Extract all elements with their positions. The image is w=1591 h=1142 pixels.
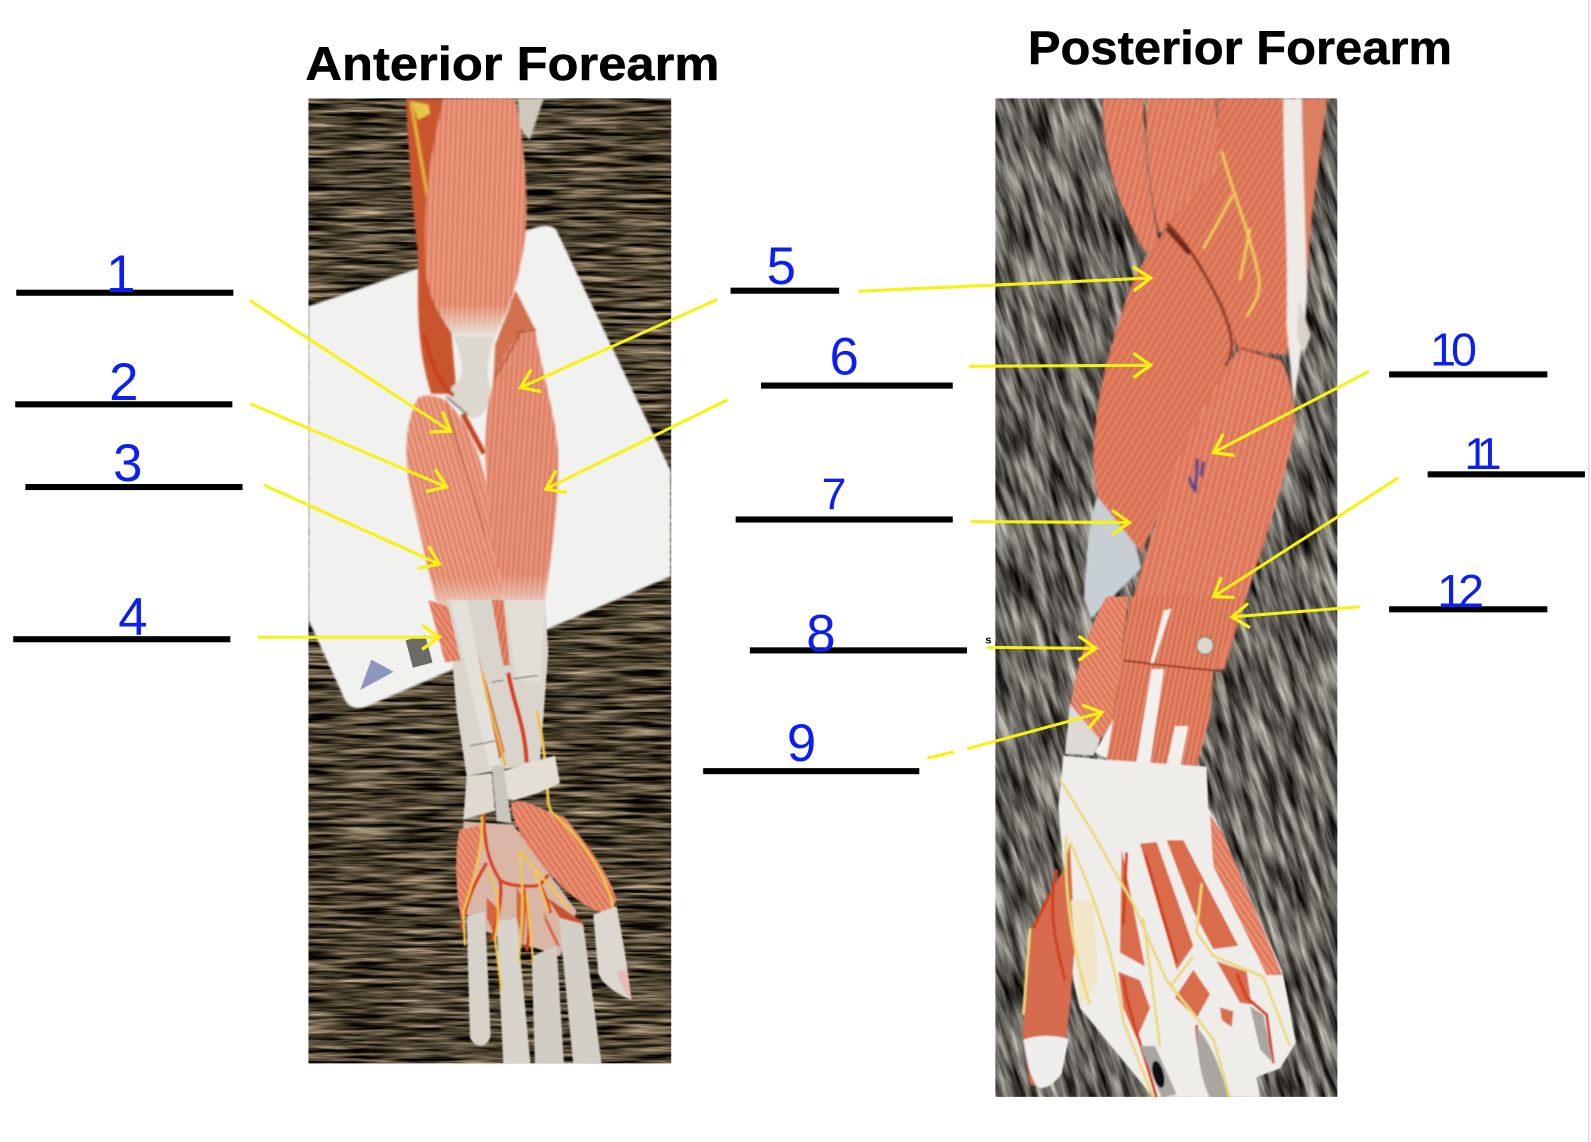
arrow 8 — [987, 647, 1096, 648]
upper arm muscles — [1103, 98, 1327, 406]
palm — [463, 821, 577, 956]
upper arm muscles — [406, 98, 544, 418]
arrow 4 — [258, 636, 439, 639]
panel: posterior wrist and hand — [1023, 597, 1296, 1100]
number 10: 10 — [1430, 323, 1476, 375]
number 3: 3 — [113, 434, 143, 493]
outer muscle — [1210, 814, 1283, 975]
pin — [1197, 637, 1213, 654]
number 6: 6 — [830, 327, 859, 386]
number 11: 11 — [1464, 430, 1500, 479]
forearm tendons — [447, 600, 548, 776]
interosseous muscles — [1118, 840, 1252, 1039]
wrist band — [463, 773, 495, 820]
tendon strips — [1095, 609, 1188, 768]
arrow 11 — [1214, 478, 1398, 597]
arrow 10 — [1214, 371, 1369, 453]
finger gaps — [1140, 1006, 1273, 1098]
carpet background — [995, 98, 1338, 1097]
arrow 9 stub — [927, 752, 954, 758]
nerves — [463, 811, 613, 991]
arrow 2 — [251, 404, 446, 487]
page edge — [1588, 0, 1590, 1142]
cream panel — [1071, 900, 1098, 1008]
panel: anterior forearm photo — [308, 98, 672, 1063]
arrow 3 — [264, 485, 439, 564]
arrow 12 — [1232, 607, 1360, 617]
board logo — [360, 660, 394, 690]
stray mark: s — [985, 634, 991, 646]
lower extensor muscles — [1070, 597, 1128, 740]
forearm flexor muscles — [406, 396, 504, 621]
number 8: 8 — [806, 604, 836, 663]
thenar muscle — [511, 801, 617, 913]
carpet background — [308, 98, 672, 1063]
arrows — [250, 278, 1398, 758]
handwritten numbers — [106, 237, 1500, 773]
arrow 1 — [250, 300, 451, 431]
hypothenar muscle — [456, 825, 482, 928]
panel: anterior wrist and hand — [428, 600, 632, 1065]
panel: posterior forearm photo — [995, 98, 1338, 1097]
thumb — [1023, 842, 1075, 1088]
extensor digitorum muscle — [1121, 348, 1295, 670]
title: Anterior Forearm: Anterior Forearm — [305, 38, 719, 91]
fingers — [467, 911, 491, 1046]
number 7: 7 — [822, 470, 846, 519]
arteries — [462, 814, 551, 951]
answer lines — [13, 288, 1585, 774]
nerves — [1023, 780, 1290, 1098]
arrow 9 — [967, 712, 1102, 749]
brachioradialis muscle — [485, 329, 558, 619]
white board — [308, 226, 671, 708]
arrow 5 to anterior — [521, 299, 717, 388]
arrow 5 to posterior — [858, 278, 1151, 291]
back of hand — [1058, 756, 1296, 1100]
tendon at elbow and wrist extensors — [1084, 151, 1259, 619]
arteries — [1123, 852, 1273, 1098]
arrow 6 to anterior — [546, 400, 728, 489]
band cut line — [1123, 661, 1222, 671]
number 5: 5 — [767, 237, 796, 296]
number 2: 2 — [109, 353, 138, 412]
number 1: 1 — [106, 245, 135, 304]
board sticker — [406, 635, 433, 668]
arrow 7 — [971, 522, 1129, 523]
number 9: 9 — [787, 714, 816, 773]
title: Posterior Forearm: Posterior Forearm — [1028, 22, 1452, 75]
number 4: 4 — [118, 588, 148, 647]
number 12: 12 — [1437, 565, 1482, 617]
arrow 6 to posterior — [969, 365, 1151, 366]
